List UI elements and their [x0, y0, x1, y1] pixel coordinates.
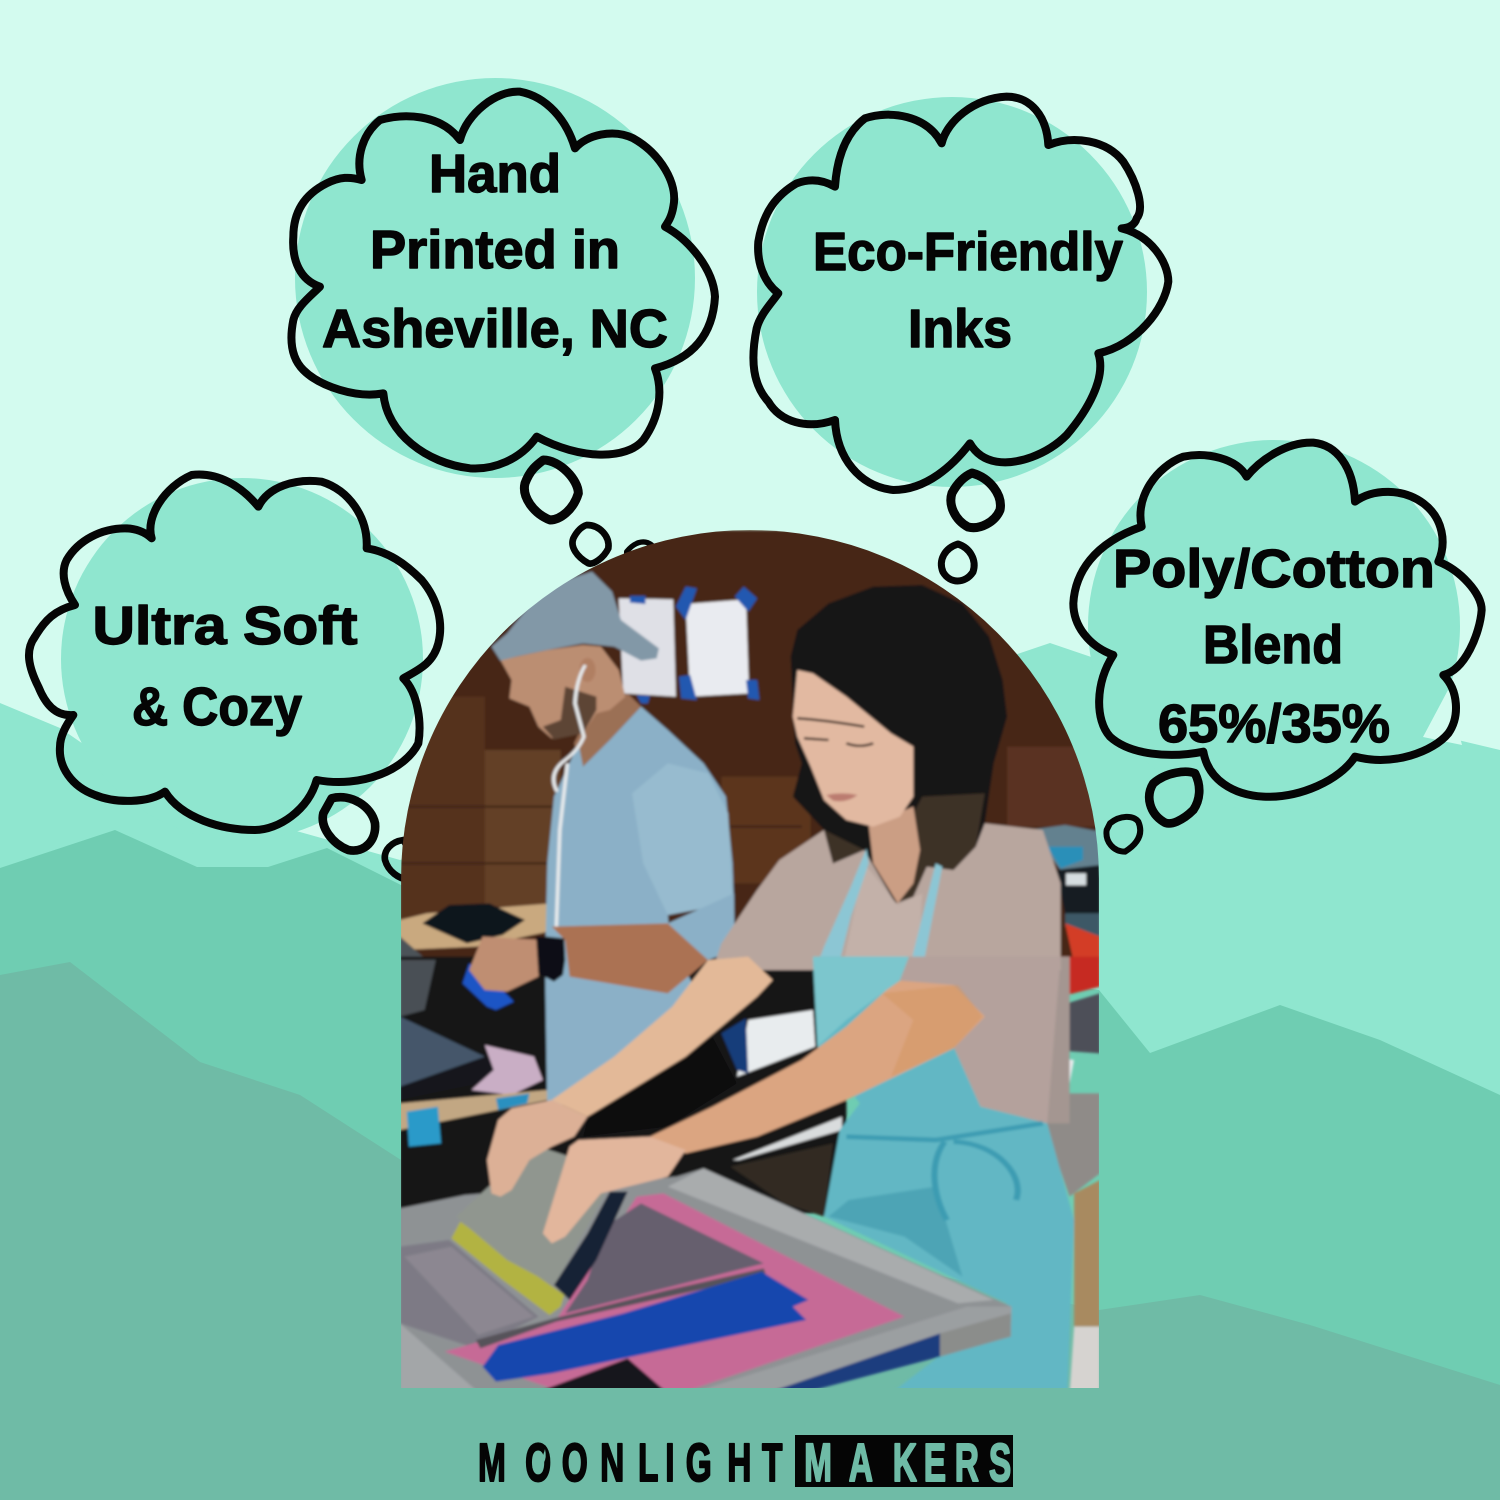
mountain layer: light	[0, 643, 1500, 1500]
woman: apron, arms	[552, 957, 1074, 1393]
wall papers with blue tape	[619, 587, 759, 703]
thought bubble: hand printed: Printed in	[370, 220, 620, 280]
man: arm, hand, watch, blue tape	[462, 893, 737, 1137]
thought bubble: ultra soft and cozy: & Cozy	[132, 677, 302, 737]
thought bubble: poly cotton blend	[1073, 440, 1482, 852]
logo: Moonlight Makers	[478, 1432, 1013, 1493]
thought bubble: poly cotton blend: Poly/Cotton	[1113, 539, 1435, 599]
wood wall	[400, 530, 1101, 963]
logo: Moonlight Makers: MOONLIGHT	[478, 1432, 782, 1493]
thought bubble: eco-friendly inks: Eco-Friendly	[813, 222, 1123, 282]
dark workshop background	[400, 957, 1100, 1393]
thought bubble: hand printed: Hand	[429, 144, 561, 204]
thought bubble: poly cotton blend: Blend	[1203, 615, 1343, 675]
logo: Moonlight Makers: MAKERS	[804, 1432, 1011, 1493]
back right clothes piles	[1036, 823, 1099, 958]
thought bubble: eco-friendly inks	[753, 97, 1168, 581]
screen frame and print	[400, 1168, 1012, 1393]
man: shirt, face, cap, earphones	[492, 572, 734, 1117]
photo: two people screen printing in arch frame	[400, 530, 1101, 1393]
thought bubble: hand printed	[291, 78, 715, 570]
hands on squeegee	[487, 1100, 686, 1243]
thought bubble: ultra soft and cozy	[29, 475, 440, 880]
woman: shirt, hair, neck, face	[712, 585, 1061, 970]
light patch beside poly bubble	[1423, 690, 1462, 745]
thought bubble: hand printed: Asheville, NC	[322, 299, 668, 359]
thought bubble: poly cotton blend: 65%/35%	[1158, 694, 1390, 754]
thought bubble: ultra soft and cozy: Ultra Soft	[92, 596, 358, 656]
squeegee	[451, 1145, 628, 1315]
thought bubble: eco-friendly inks: Inks	[908, 299, 1012, 359]
clothes and table behind the man, top left	[400, 903, 556, 960]
mountain layer: medium	[0, 830, 1500, 1500]
mountain layer: dark	[0, 962, 1500, 1500]
